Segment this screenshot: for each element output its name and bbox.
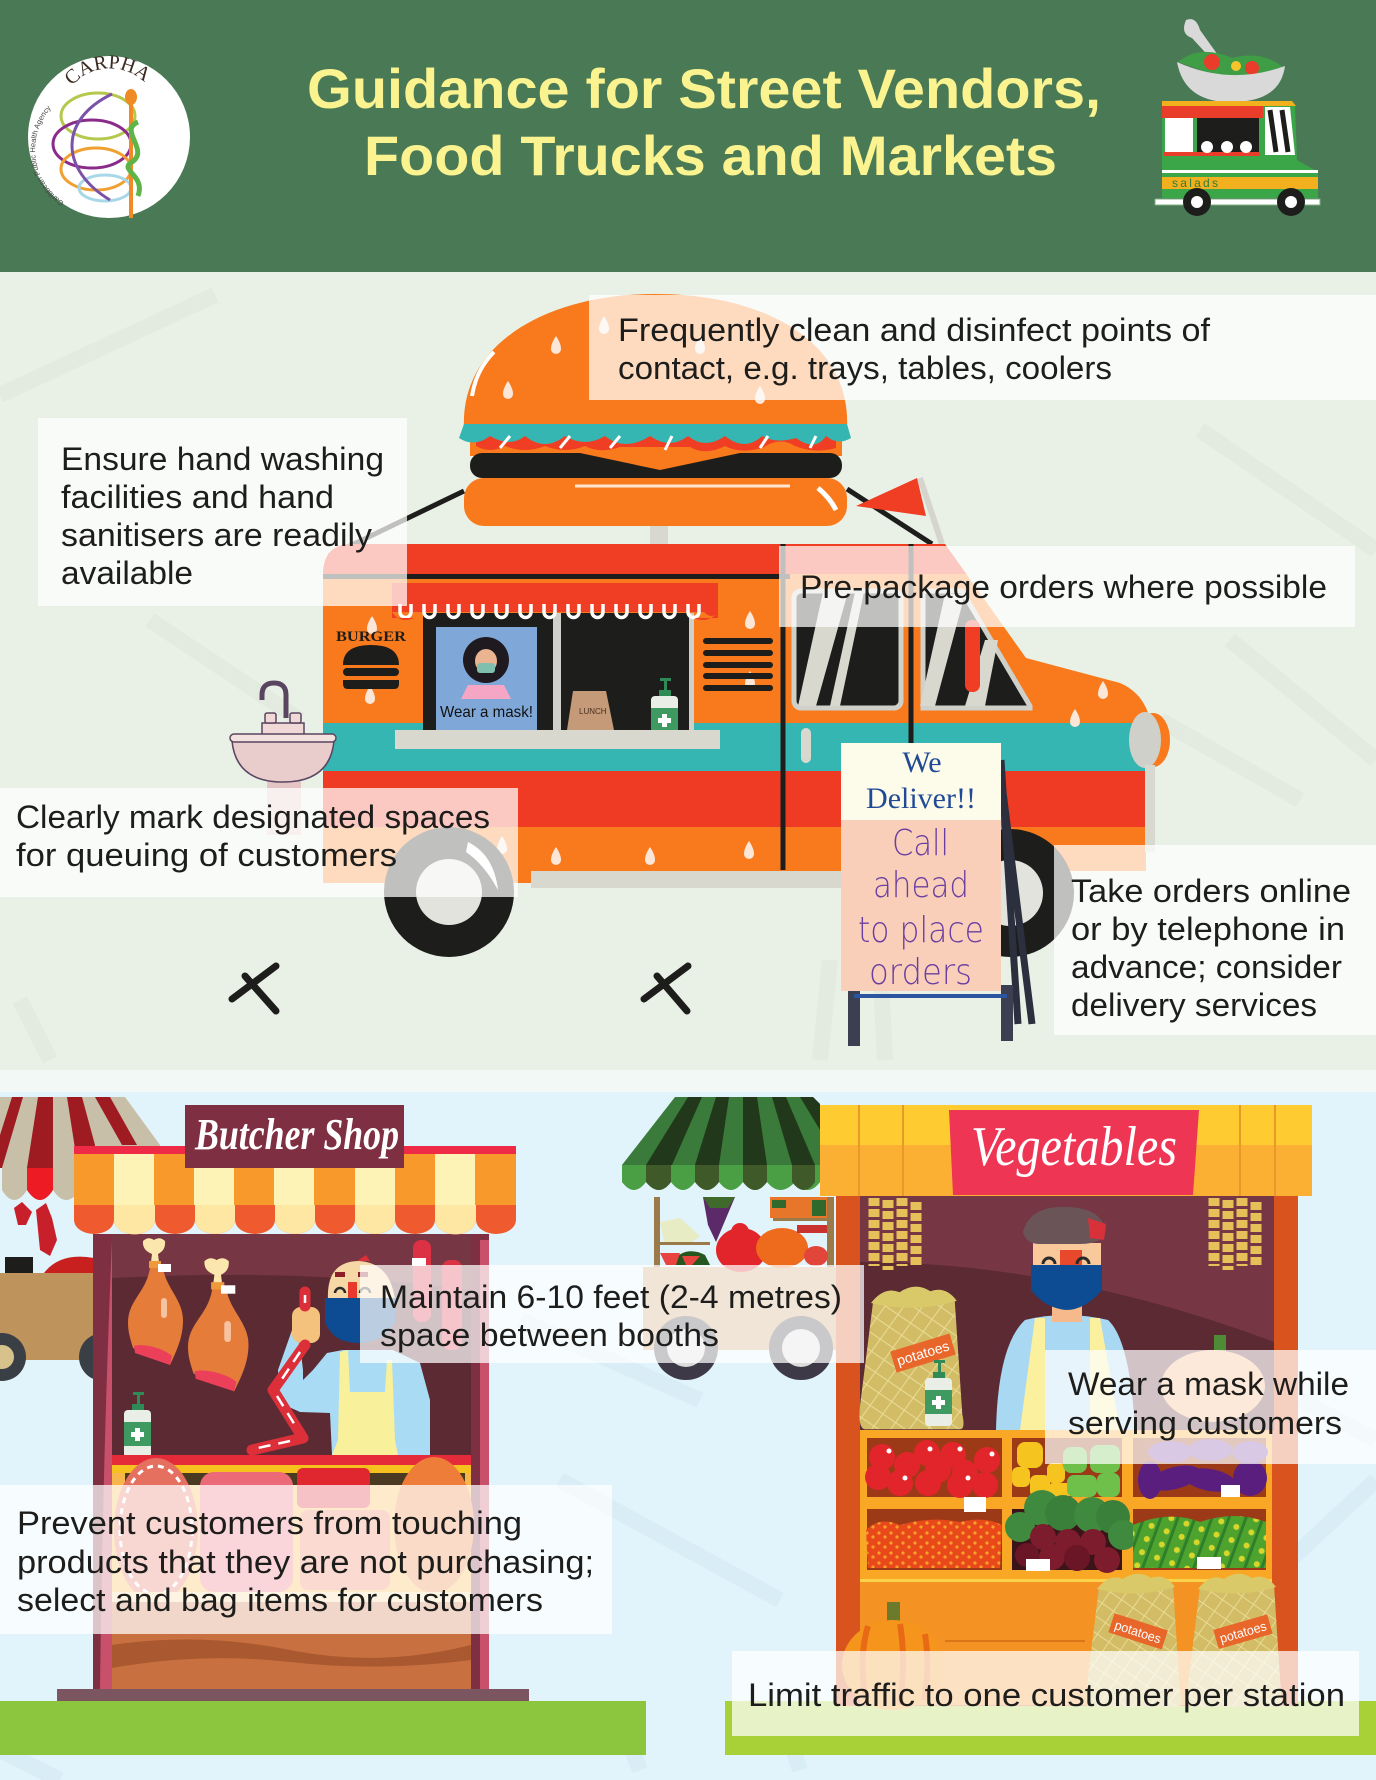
callout: prevent touching: products that they are not purchasing; [17, 1544, 594, 1580]
icon: CARPHA logo [28, 55, 190, 218]
hanging hams [128, 1238, 248, 1391]
potato sack: potatoes [1218, 1618, 1269, 1646]
potato sack with bottle: potatoes [895, 1338, 951, 1369]
awning [74, 1146, 516, 1234]
queue marker X [232, 966, 276, 1011]
carrots [866, 1520, 1002, 1568]
callout: hand washing: sanitisers are readily [61, 517, 372, 553]
illustration: green produce cart [622, 1097, 837, 1380]
sign: we deliver: ahead [873, 865, 969, 906]
callout: prevent touching: Prevent customers from touching [17, 1505, 522, 1541]
callout: take orders: delivery services [1071, 987, 1317, 1023]
title: Food Trucks and Markets [364, 124, 1057, 187]
icon: lunch bag: LUNCH [579, 707, 607, 716]
eggplants [1138, 1439, 1268, 1499]
callout: hand washing: facilities and hand [61, 479, 334, 515]
sign: vegetables [949, 1110, 1199, 1195]
queue marker X [644, 966, 688, 1011]
truck windows [794, 591, 1030, 708]
sign: we deliver: to place [858, 910, 984, 951]
icon: salad truck: salads [1172, 176, 1218, 190]
counter with meats [112, 1455, 474, 1689]
callout: maintain space [360, 1265, 864, 1363]
potato sack with bottle [859, 1287, 964, 1429]
header band [0, 0, 1376, 272]
callout: take orders: Take orders online [1071, 873, 1351, 909]
sign: we deliver: orders [869, 952, 972, 993]
icon: sanitiser bottle [651, 678, 678, 744]
garlic strings [874, 1198, 916, 1270]
produce shelves [860, 1430, 1272, 1599]
sign: we deliver: We [902, 746, 942, 779]
callout: limit traffic: Limit traffic to one customer per station [748, 1677, 1345, 1713]
illustration: butcher shop [57, 1105, 529, 1701]
callout: pre-package [779, 546, 1355, 627]
peppers [1012, 1442, 1120, 1497]
callout: queuing: for queuing of customers [16, 837, 397, 873]
tomatoes [865, 1440, 1000, 1498]
garlic strings [1214, 1198, 1256, 1270]
burger logo on truck: BURGER [336, 629, 406, 645]
serving shelf [395, 730, 720, 749]
vegetable vendor with mask [996, 1207, 1135, 1430]
orange pumpkin [842, 1602, 944, 1710]
icon: burger on roof [459, 294, 851, 526]
callout: prevent touching [0, 1485, 612, 1634]
headlight [1129, 712, 1170, 852]
callout: queuing [0, 788, 518, 897]
callout: take orders [1054, 845, 1376, 1035]
callout: maintain space: space between booths [380, 1317, 719, 1353]
callout: clean and disinfect [589, 295, 1376, 400]
hanging sausages [412, 1240, 462, 1350]
beets [1005, 1490, 1138, 1573]
illustration: burger food truck [230, 294, 1170, 1046]
callout: clean and disinfect: Frequently clean and disinfect points of [618, 312, 1210, 348]
callout: wear a mask: serving customers [1068, 1405, 1342, 1441]
door lines [783, 544, 911, 870]
icon: CARPHA logo: CARPHA [66, 55, 148, 83]
callout: take orders: or by telephone in [1071, 911, 1345, 947]
stall frame [836, 1196, 1298, 1706]
lower counter [860, 1579, 1272, 1705]
callout: prevent touching: select and bag items for customers [17, 1582, 543, 1618]
potato sack [1188, 1574, 1282, 1707]
sign: butcher shop: Butcher Shop [194, 1110, 399, 1159]
price tags [960, 1485, 1240, 1599]
icon: salad truck [1155, 19, 1320, 216]
sign: vegetables: Vegetables [971, 1116, 1177, 1178]
pale pumpkin [1161, 1335, 1265, 1422]
truck body [320, 540, 1170, 888]
burger logo on truck [336, 629, 406, 689]
callout: wear a mask: Wear a mask while [1068, 1366, 1349, 1402]
sign: butcher shop [185, 1105, 404, 1168]
icon: wash basin [230, 683, 336, 835]
sign: we deliver: Deliver!! [866, 782, 976, 815]
potato sack: potatoes [1113, 1617, 1164, 1647]
ground strip right [725, 1701, 1376, 1755]
antenna lines and flag [329, 478, 942, 556]
butcher with mask [252, 1255, 430, 1455]
icon: CARPHA logo: Caribbean Public Health Agency [30, 106, 63, 206]
callout: take orders: advance; consider [1071, 949, 1342, 985]
sign: we deliver: Call [892, 823, 949, 864]
illustration: vegetable stall [820, 1105, 1312, 1710]
callout: pre-package: Pre-package orders where possible [800, 569, 1327, 605]
truck wheels [384, 827, 1074, 957]
vent slats [706, 641, 770, 688]
illustration: back stall with cart [0, 1097, 160, 1381]
callout: hand washing: available [61, 555, 193, 591]
stall roof [820, 1105, 1312, 1196]
window awning [392, 583, 718, 620]
callout: maintain space: Maintain 6-10 feet (2-4 metres) [380, 1279, 842, 1315]
ground strip left [0, 1701, 646, 1755]
title [307, 57, 1101, 187]
callout: limit traffic [732, 1651, 1359, 1736]
callout: queuing: Clearly mark designated spaces [16, 799, 490, 835]
base plinth [57, 1689, 529, 1701]
poster: wear a mask: Wear a mask! [440, 704, 533, 721]
title: Guidance for Street Vendors, [307, 57, 1101, 120]
sign: we deliver [841, 743, 1032, 1046]
stall frame [93, 1234, 489, 1689]
callout: clean and disinfect: contact, e.g. trays, tables, coolers [618, 350, 1112, 386]
service window [423, 613, 694, 744]
sanitiser bottle [124, 1392, 151, 1458]
callout: hand washing: Ensure hand washing [61, 441, 384, 477]
callout: wear a mask [1045, 1350, 1376, 1464]
callout: hand washing [38, 418, 407, 606]
green beans [1133, 1516, 1266, 1568]
icon: lunch bag [567, 691, 614, 730]
potato sack [1086, 1574, 1181, 1707]
poster: wear a mask [436, 627, 537, 730]
